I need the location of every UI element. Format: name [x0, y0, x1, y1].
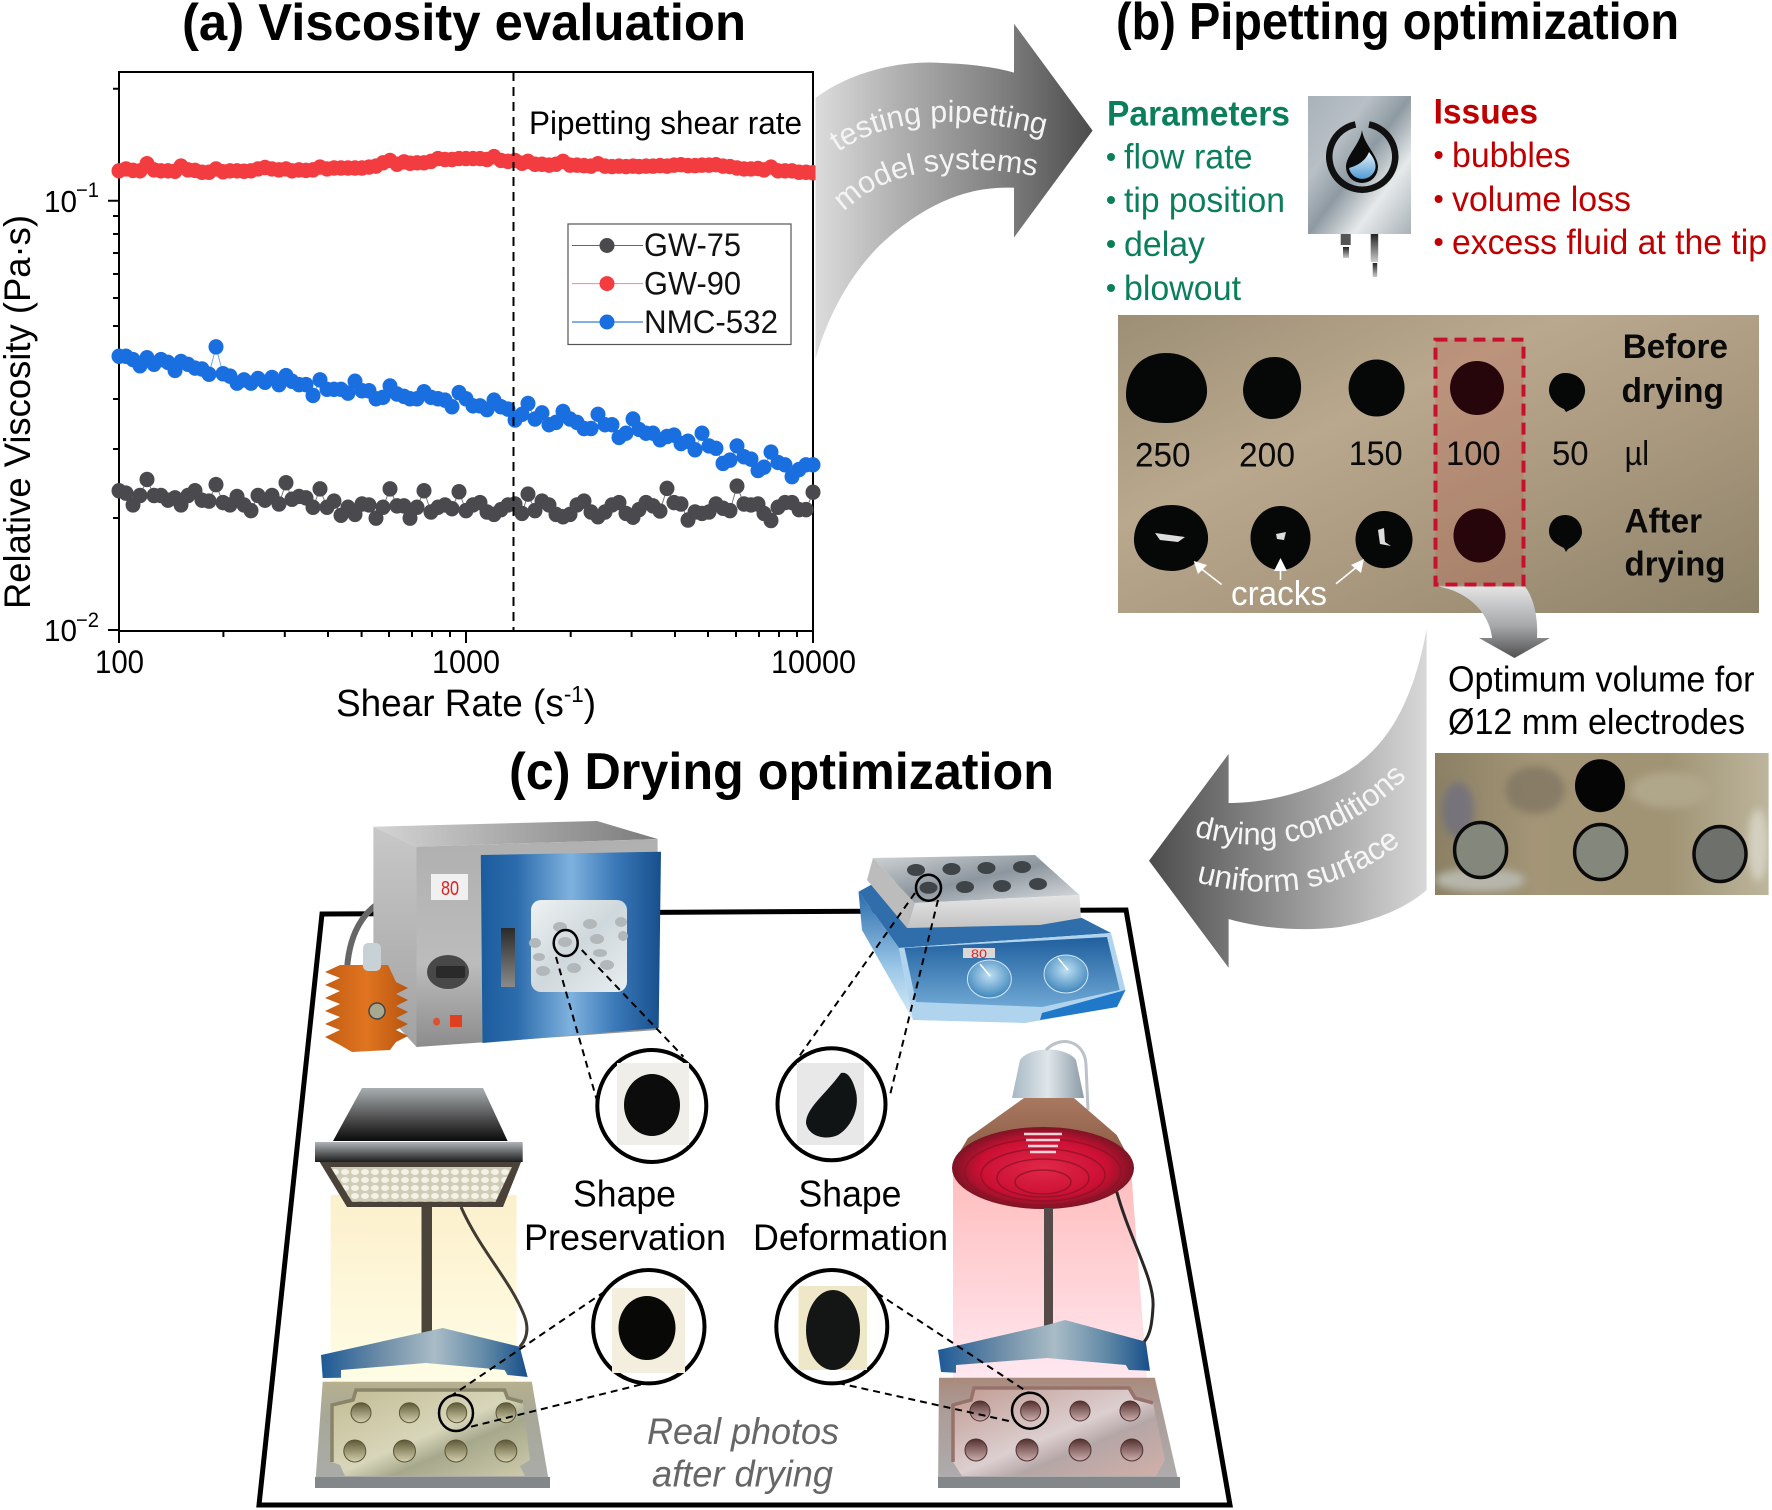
LED light glow — [331, 1195, 517, 1385]
legend: GW-75 — [644, 227, 741, 263]
list: parameters: Parameters — [1107, 95, 1290, 134]
volume labels: µl — [1625, 435, 1649, 473]
dried electrodes — [1455, 822, 1746, 882]
photo: oven dried sample — [597, 1050, 706, 1162]
photo: LED dried sample — [593, 1270, 704, 1383]
title: drying optimization: (c) Drying optimization — [509, 743, 1054, 801]
x tick labels: 100 — [95, 644, 144, 680]
zoom lines: lamp and oven samples to photos — [450, 893, 1029, 1427]
infrared lamp base — [938, 1320, 1150, 1373]
photo: hot plate dried sample — [778, 1048, 886, 1160]
list: parameters: flow rate — [1124, 138, 1253, 177]
hot plate temperature display — [963, 947, 995, 961]
cracks callout: cracks — [1231, 575, 1327, 613]
illustration: vacuum oven — [325, 821, 661, 1052]
x axis title: ) — [584, 683, 596, 725]
infrared copper cone — [955, 1098, 1130, 1160]
label: shape deformation — [753, 1174, 948, 1258]
x axis title: -1 — [564, 681, 584, 707]
annotation: pipetting shear rate: Pipetting shear rate — [529, 105, 802, 141]
LED lamp hood — [333, 1088, 508, 1141]
before and after labels — [1622, 328, 1728, 584]
legend — [568, 224, 791, 344]
label: shape preservation: Shape — [573, 1174, 676, 1215]
sample tray under LED — [315, 1382, 550, 1488]
before and after labels: drying — [1622, 372, 1724, 410]
oven window — [531, 900, 627, 992]
axis ticks — [108, 89, 813, 643]
list: parameters: tip position — [1124, 181, 1285, 220]
illustration: LED lamp — [315, 1088, 550, 1488]
list: issues: bubbles — [1452, 136, 1571, 175]
oven knob — [427, 955, 469, 989]
LED lamp pole and cable — [422, 1207, 527, 1347]
volume labels: 150 — [1349, 435, 1403, 473]
list: parameters: blowout — [1124, 269, 1241, 308]
y tick labels: 10 — [44, 613, 77, 648]
y tick labels — [44, 179, 99, 648]
list: parameters: delay — [1124, 225, 1205, 264]
arrow: testing pipetting model systems — [816, 24, 1092, 358]
oven temperature display — [431, 874, 468, 900]
text: optimum volume: Optimum volume for — [1448, 659, 1755, 700]
label: shape preservation — [524, 1174, 726, 1258]
volume labels: 100 — [1446, 435, 1501, 473]
series: NMC-532 — [119, 347, 813, 477]
highlight: optimum 100 µl column — [1436, 340, 1524, 585]
arrow: drying conditions uniform surface: drying conditions — [1196, 768, 1404, 851]
oven temperature display: 80 — [441, 878, 459, 900]
oven door — [481, 852, 661, 1043]
vacuum pump — [325, 943, 408, 1052]
LED lamp base — [321, 1328, 528, 1378]
oven handle — [501, 928, 515, 987]
label: shape deformation: Shape — [798, 1174, 902, 1215]
legend: GW-90 — [644, 266, 741, 302]
icon: pipette head with drop — [1308, 96, 1411, 277]
arrow: testing pipetting model systems: model systems — [835, 150, 1037, 210]
illustration: infrared lamp — [938, 1042, 1180, 1488]
oven sample circle — [554, 930, 578, 956]
list: issues: volume loss — [1452, 180, 1631, 219]
before and after labels: Before — [1623, 328, 1728, 366]
label: shape preservation: Preservation — [524, 1217, 726, 1258]
x tick labels: 1000 — [432, 644, 500, 680]
infrared bulb neck — [1012, 1050, 1084, 1098]
list: issues: Issues — [1434, 93, 1538, 132]
illustration: hot plate — [858, 855, 1126, 1023]
hot plate sample circle — [916, 875, 941, 901]
wet electrode — [1575, 759, 1625, 812]
volume labels: 50 — [1552, 435, 1589, 473]
before and after labels: After — [1624, 503, 1702, 541]
panel: drying stage frame — [259, 910, 1230, 1505]
panel: droplet volume photo — [1118, 315, 1759, 613]
y tick labels: −2 — [76, 609, 99, 632]
infrared glow — [953, 1168, 1147, 1380]
panel: electrode photo — [1435, 753, 1769, 895]
oven lights — [433, 1015, 462, 1027]
arrow: drying conditions uniform surface: uniform surface — [1199, 834, 1398, 892]
y tick labels: −1 — [76, 179, 99, 202]
x axis title: Shear Rate (s — [336, 683, 570, 725]
pipetting shear rate marker — [512, 72, 514, 631]
caption: real photos after drying: Real photos — [647, 1411, 839, 1452]
list: parameters — [1107, 95, 1290, 308]
cracks callout — [1194, 558, 1364, 613]
text: optimum volume: Ø12 mm electrodes — [1448, 701, 1745, 742]
hot plate base — [858, 880, 1111, 948]
label: shape deformation: Deformation — [753, 1217, 948, 1258]
photo: infrared dried sample — [776, 1270, 887, 1383]
volume labels — [1135, 435, 1649, 474]
legend: NMC-532 — [644, 304, 778, 340]
list: issues — [1434, 93, 1767, 262]
crack marks — [1155, 528, 1391, 546]
volume labels: 250 — [1135, 436, 1191, 474]
plot frame — [119, 72, 813, 631]
x tick labels: 10000 — [771, 644, 856, 680]
series: GW-75 — [119, 479, 813, 521]
heating block — [873, 855, 1080, 903]
droplets before drying — [1126, 353, 1585, 423]
hot plate knobs — [967, 955, 1088, 998]
list: issues: excess fluid at the tip — [1452, 223, 1767, 262]
y tick labels: 10 — [44, 184, 77, 219]
series: GW-90 — [119, 157, 813, 173]
hot plate temperature display: 80 — [971, 947, 987, 961]
caption: real photos after drying — [647, 1411, 839, 1495]
x tick labels — [95, 644, 856, 680]
before and after labels: drying — [1624, 546, 1726, 584]
volume labels: 200 — [1239, 436, 1295, 474]
text: optimum volume — [1448, 659, 1755, 742]
caption: real photos after drying: after drying — [652, 1454, 833, 1495]
arrow: testing pipetting model systems: testing pipetting — [830, 100, 1046, 150]
arrow: drying conditions uniform surface — [1149, 630, 1426, 968]
droplets after drying — [1134, 505, 1582, 571]
infrared red dome — [952, 1127, 1134, 1209]
panel: viscosity chart — [0, 72, 856, 725]
arrow: to optimum volume — [1439, 586, 1550, 658]
sample tray under infrared lamp — [938, 1378, 1180, 1488]
infrared pole and cable — [1044, 1192, 1153, 1342]
